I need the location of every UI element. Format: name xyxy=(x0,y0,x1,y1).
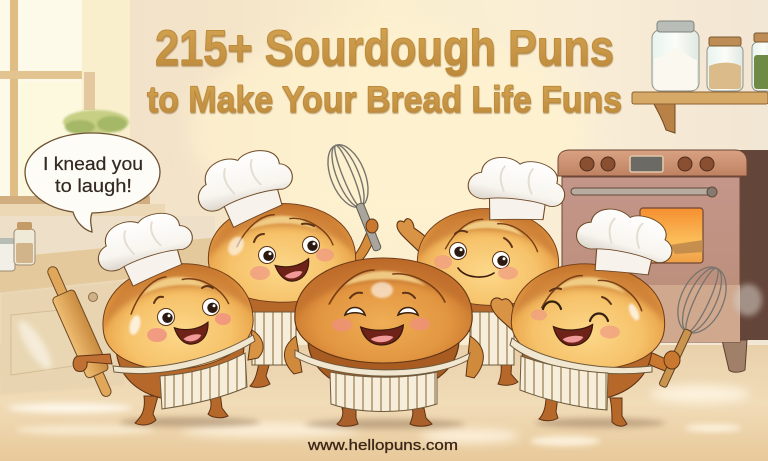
face xyxy=(250,224,334,283)
chef hat xyxy=(462,149,570,234)
loaf body xyxy=(95,255,263,407)
oven window xyxy=(640,208,703,263)
apron xyxy=(295,350,470,412)
face xyxy=(332,293,430,345)
arm holding whisk xyxy=(352,230,376,266)
legs and feet xyxy=(135,392,228,425)
floor flour xyxy=(8,317,750,446)
face xyxy=(434,231,518,280)
loaf body xyxy=(291,256,476,394)
wooden shelf xyxy=(632,92,768,133)
flour dust by the oven xyxy=(734,284,762,316)
chef hat xyxy=(91,207,200,292)
flour jar xyxy=(652,21,699,91)
arm xyxy=(248,330,263,360)
flour dusting xyxy=(371,282,393,298)
kitchen counter and cabinets xyxy=(0,216,220,395)
website url: www.hellopuns.com xyxy=(307,437,458,454)
speech bubble xyxy=(25,133,160,232)
oven door and lower body xyxy=(562,177,740,342)
flour dusting xyxy=(128,314,142,336)
chef hat xyxy=(191,144,300,233)
apron xyxy=(252,312,296,365)
oven xyxy=(558,150,768,372)
loaf body xyxy=(411,203,564,337)
herb jar xyxy=(752,33,768,91)
loaf body xyxy=(504,258,671,404)
loaf character: back left xyxy=(191,144,376,387)
control panel xyxy=(558,150,747,176)
grain jar xyxy=(707,37,743,91)
knobs xyxy=(580,157,714,171)
apron xyxy=(510,338,652,410)
display xyxy=(630,156,663,172)
title xyxy=(147,20,622,120)
apron xyxy=(470,312,514,365)
whisk arm xyxy=(640,350,672,372)
legs xyxy=(498,355,518,385)
rolling pin hand xyxy=(73,354,112,371)
whisk: front right loaf xyxy=(643,259,736,395)
arms xyxy=(284,336,483,378)
whisk hand xyxy=(664,351,680,369)
legs and feet xyxy=(539,396,627,426)
oven lower drawer xyxy=(562,285,740,342)
oven handle xyxy=(571,187,717,197)
chef hat xyxy=(568,199,680,290)
raised arm xyxy=(397,219,432,258)
kitchen window xyxy=(0,0,165,216)
oven legs xyxy=(722,340,747,372)
floor xyxy=(0,345,768,461)
loaf character: front left xyxy=(91,207,263,425)
loaf character: front centre xyxy=(284,256,483,426)
flour dusting xyxy=(627,302,641,322)
potted plant on the sill xyxy=(63,110,129,134)
oven side xyxy=(740,150,768,340)
legs xyxy=(250,355,272,387)
bubble text line 2: to laugh! xyxy=(55,176,132,196)
face xyxy=(531,288,620,346)
whisk: back left loaf xyxy=(320,139,394,257)
character shadows xyxy=(120,417,665,429)
background wall xyxy=(0,0,768,350)
face xyxy=(147,286,231,346)
whisk hand: back left loaf xyxy=(366,219,378,233)
wall light glow xyxy=(190,30,590,230)
title line 2: to Make Your Bread Life Funs xyxy=(147,79,622,120)
raised arm xyxy=(491,298,524,330)
rolling pin xyxy=(40,262,119,401)
title line 1: 215+ Sourdough Puns xyxy=(155,20,614,76)
loaf character: back right xyxy=(397,149,570,385)
loaf character: front right xyxy=(491,199,680,426)
flour dusting xyxy=(225,234,247,258)
loaf body xyxy=(206,202,358,331)
jars on the counter xyxy=(0,222,35,271)
legs and feet xyxy=(337,408,432,426)
bubble text line 1: I knead you xyxy=(43,154,143,174)
apron xyxy=(113,335,255,409)
